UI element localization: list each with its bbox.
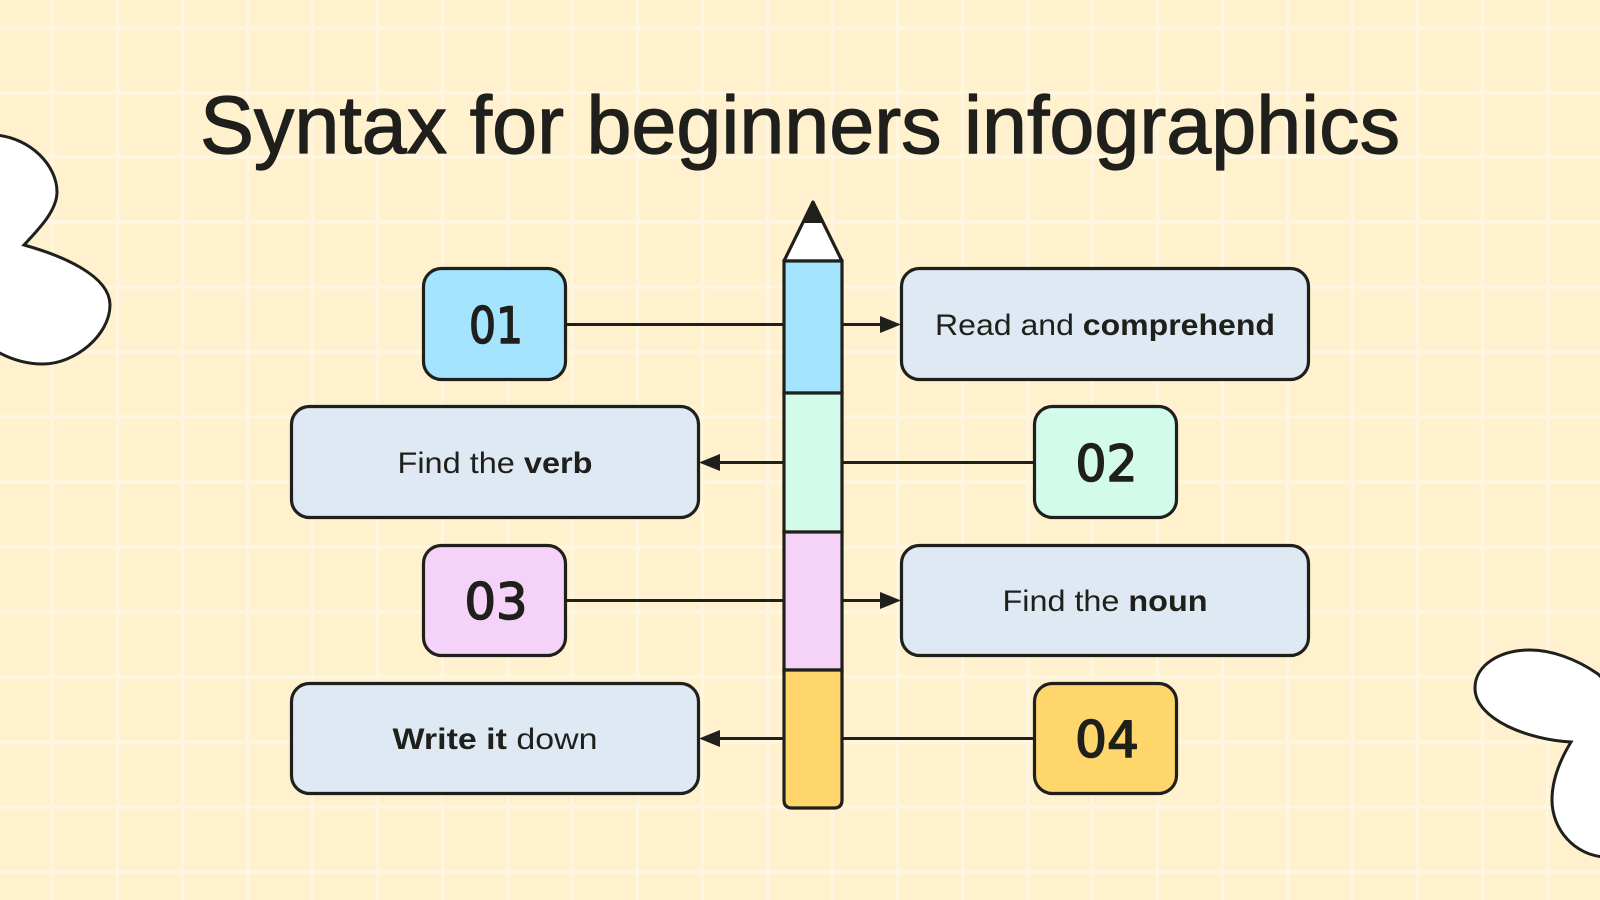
step 03 text bbox=[902, 546, 1308, 656]
pencil segment: mint bbox=[784, 393, 842, 532]
step 04 text: Write it down bbox=[392, 723, 598, 756]
pencil tip bbox=[784, 201, 842, 261]
step 02 text: Find the verb bbox=[398, 447, 592, 480]
pencil segment: pink bbox=[784, 532, 842, 670]
pencil segment: blue bbox=[784, 261, 842, 393]
step 01 text: Read and comprehend bbox=[935, 309, 1275, 342]
step 03 badge: 03 bbox=[464, 573, 528, 631]
connector: row 2 bbox=[699, 454, 1034, 471]
pencil segment: yellow bbox=[784, 670, 842, 808]
step 01 text bbox=[902, 268, 1308, 380]
connector: row 4 bbox=[699, 730, 1034, 747]
step 04 badge bbox=[1034, 684, 1176, 794]
step 03 text: Find the noun bbox=[1002, 585, 1208, 618]
decorative blob: right bbox=[1475, 650, 1600, 857]
title: Syntax for beginners infographics bbox=[200, 80, 1400, 171]
step 01 badge: 01 bbox=[469, 297, 523, 355]
connector: row 3 bbox=[565, 592, 901, 609]
step 01 badge bbox=[424, 268, 566, 380]
pencil bbox=[784, 201, 842, 808]
step 04 badge: 04 bbox=[1075, 711, 1139, 769]
step 02 text bbox=[292, 406, 698, 518]
step 03 badge bbox=[424, 546, 566, 656]
step 02 badge bbox=[1034, 406, 1176, 518]
decorative blob: left bbox=[0, 135, 110, 364]
connector: row 1 bbox=[565, 316, 901, 333]
step 02 badge: 02 bbox=[1076, 435, 1138, 493]
step 04 text bbox=[292, 684, 698, 794]
